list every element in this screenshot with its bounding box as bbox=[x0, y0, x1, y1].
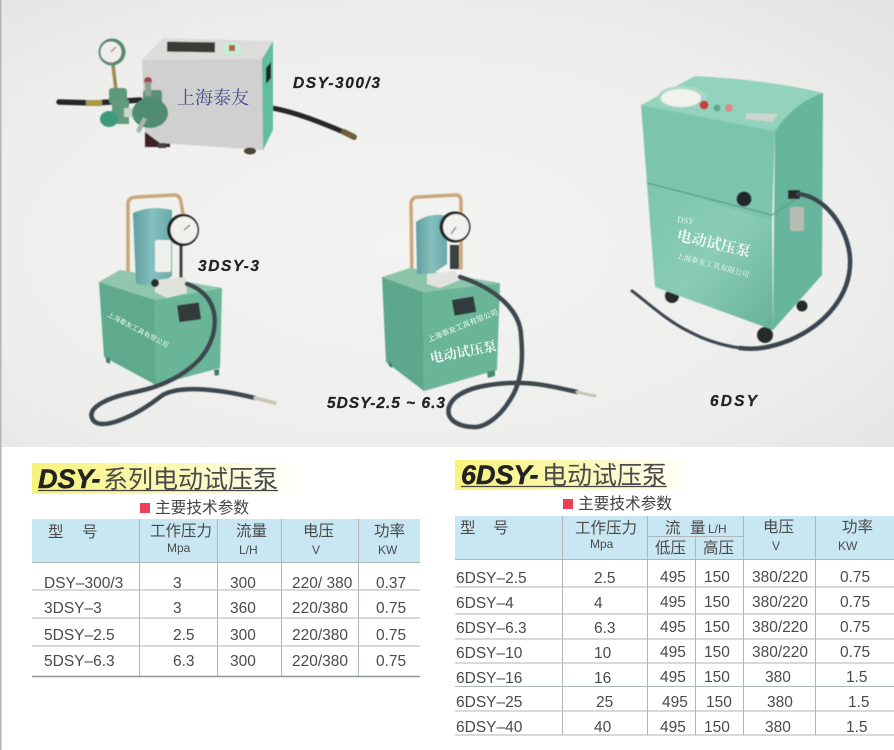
rows: 495 bbox=[660, 719, 686, 736]
label: 6DSY: 6DSY bbox=[710, 393, 759, 410]
rows: 0.75 bbox=[840, 644, 870, 661]
table header: Mpa bbox=[590, 537, 614, 551]
product photo: 3DSY-3 pump bbox=[91, 195, 275, 424]
rows: 495 bbox=[660, 669, 686, 686]
table header: 功率 bbox=[374, 522, 405, 540]
rows: 380/220 bbox=[752, 594, 808, 611]
cabinet lettering bbox=[675, 214, 752, 279]
table header bbox=[455, 516, 894, 559]
rows: 150 bbox=[704, 594, 730, 611]
rows: 6.3 bbox=[594, 620, 616, 637]
rows: 300 bbox=[230, 653, 256, 670]
table header: 号 bbox=[493, 519, 509, 537]
rows: 16 bbox=[594, 670, 611, 687]
rows: 0.75 bbox=[840, 569, 870, 586]
subheading: key parameters (left): 主要技术参数 bbox=[155, 499, 249, 517]
table header: 流量 bbox=[236, 522, 267, 540]
table header: V bbox=[312, 543, 320, 557]
rows bbox=[44, 575, 406, 670]
table header: 高压 bbox=[703, 539, 734, 557]
cabinet lettering: 上海泰友: 上海泰友 bbox=[177, 88, 249, 108]
rows: DSY–300/3 bbox=[44, 575, 123, 592]
rows: 0.75 bbox=[840, 594, 870, 611]
section heading: DSY series: DSY- bbox=[38, 464, 101, 494]
side lettering: 上海泰友工具有限公司 bbox=[106, 310, 170, 350]
table header: KW bbox=[378, 543, 398, 557]
cabinet lettering: 上海泰友工具有限公司 bbox=[675, 250, 751, 279]
subheading: key parameters (right): 主要技术参数 bbox=[578, 495, 672, 513]
rows bbox=[456, 569, 870, 736]
tank lettering: 电动试压泵 bbox=[429, 337, 498, 366]
rows: 0.75 bbox=[376, 653, 406, 670]
rows: 495 bbox=[662, 694, 688, 711]
table header: Mpa bbox=[167, 541, 191, 555]
table header: 低压 bbox=[655, 539, 686, 557]
label: 3DSY-3: 3DSY-3 bbox=[198, 258, 259, 275]
table header: 工作压力 bbox=[150, 522, 212, 540]
rows: 150 bbox=[704, 669, 730, 686]
rows: 380 bbox=[765, 669, 791, 686]
rows: 150 bbox=[704, 619, 730, 636]
rows: 1.5 bbox=[846, 719, 868, 736]
rows: 6DSY–40 bbox=[456, 719, 523, 736]
table header: L/H bbox=[239, 543, 258, 557]
rows: 6DSY–10 bbox=[456, 645, 523, 662]
rows: 3DSY–3 bbox=[44, 600, 102, 617]
table header: 量 bbox=[690, 520, 706, 537]
rows: 6.3 bbox=[173, 653, 195, 670]
rows: 495 bbox=[660, 569, 686, 586]
rows: 300 bbox=[230, 575, 256, 592]
product photo: DSY-300/3 pump bbox=[59, 38, 354, 154]
rows: 380/220 bbox=[752, 619, 808, 636]
rows: 40 bbox=[594, 719, 612, 736]
cabinet lettering: 电动试压泵 bbox=[675, 226, 752, 261]
photo background bbox=[0, 0, 894, 447]
rows: 0.75 bbox=[376, 627, 406, 644]
rows: 360 bbox=[230, 600, 256, 617]
table header: V bbox=[772, 539, 780, 553]
rows: 1.5 bbox=[846, 669, 868, 686]
product photo: 5DSY-2.5~6.3 pump bbox=[382, 195, 595, 427]
rows: 4 bbox=[594, 595, 603, 612]
rows: 0.37 bbox=[376, 575, 406, 592]
rows: 6DSY–2.5 bbox=[456, 570, 527, 587]
rows: 380/220 bbox=[752, 569, 808, 586]
section heading: 6DSY: 6DSY- bbox=[461, 460, 539, 490]
rows: 150 bbox=[704, 569, 730, 586]
table header bbox=[32, 519, 420, 562]
rows: 6DSY–6.3 bbox=[456, 620, 527, 637]
label: 5DSY-2.5 ~ 6.3: 5DSY-2.5 ~ 6.3 bbox=[327, 395, 445, 412]
rows: 0.75 bbox=[376, 600, 406, 617]
section heading: DSY series bbox=[32, 463, 302, 494]
rows: 5DSY–2.5 bbox=[44, 627, 115, 644]
table header: 型 bbox=[460, 519, 476, 537]
table header: 流 bbox=[665, 519, 681, 537]
rows: 1.5 bbox=[848, 694, 870, 711]
rows: 495 bbox=[660, 619, 686, 636]
rows: 220/380 bbox=[292, 653, 348, 670]
table header: 号 bbox=[82, 523, 98, 541]
table header: 电压 bbox=[763, 518, 794, 536]
rows: 380 bbox=[767, 694, 793, 711]
rows: 6DSY–4 bbox=[456, 595, 514, 612]
table header: L/H bbox=[708, 522, 727, 536]
rows: 6DSY–16 bbox=[456, 670, 522, 687]
rows: 3 bbox=[173, 575, 182, 592]
table: 6DSY bbox=[455, 516, 894, 736]
rows: 10 bbox=[594, 645, 612, 662]
rows: 495 bbox=[660, 644, 686, 661]
rows: 5DSY–6.3 bbox=[44, 653, 115, 670]
table: DSY series bbox=[32, 519, 420, 676]
cabinet lettering: DSY bbox=[677, 214, 695, 226]
table header: 工作压力 bbox=[575, 519, 637, 537]
rows: 0.75 bbox=[840, 619, 870, 636]
rows: 6DSY–25 bbox=[456, 694, 522, 711]
rows: 300 bbox=[230, 627, 256, 644]
table header: 功率 bbox=[842, 518, 873, 536]
rows: 25 bbox=[596, 694, 613, 711]
section heading: 6DSY: 电动试压泵 bbox=[542, 462, 667, 490]
rows: 150 bbox=[704, 719, 730, 736]
product photo: 6DSY cabinet pump bbox=[632, 76, 850, 349]
rows: 2.5 bbox=[594, 570, 616, 587]
rows: 150 bbox=[706, 694, 732, 711]
rows: 220/ 380 bbox=[292, 575, 353, 592]
rows: 380 bbox=[765, 719, 791, 736]
tank lettering: 上海泰友工具有限公司 bbox=[426, 306, 499, 344]
table header: 电压 bbox=[303, 522, 334, 540]
table header: KW bbox=[838, 539, 858, 553]
rows: 495 bbox=[660, 594, 686, 611]
rows: 220/380 bbox=[292, 627, 348, 644]
table header: 型 bbox=[48, 523, 64, 541]
rows: 220/380 bbox=[292, 600, 348, 617]
label: DSY-300/3: DSY-300/3 bbox=[293, 75, 380, 92]
rows: 2.5 bbox=[173, 627, 195, 644]
section heading: DSY series: 系列电动试压泵 bbox=[103, 466, 278, 494]
rows: 380/220 bbox=[752, 644, 808, 661]
rows: 150 bbox=[704, 644, 730, 661]
rows: 3 bbox=[173, 600, 182, 617]
section heading: 6DSY bbox=[455, 460, 695, 490]
tank lettering bbox=[426, 306, 499, 366]
